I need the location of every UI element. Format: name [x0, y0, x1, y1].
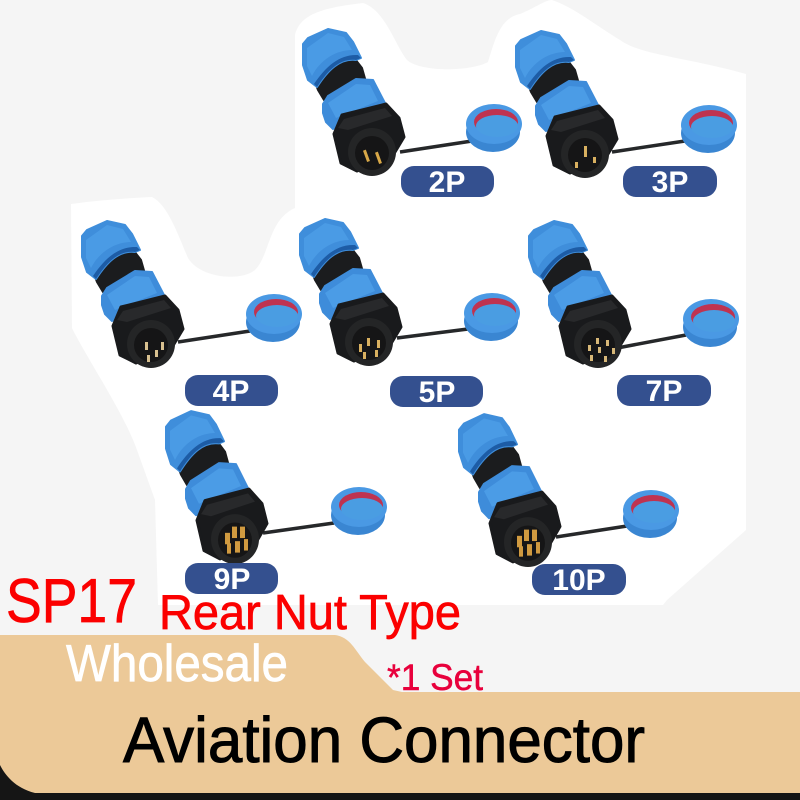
white product area: [71, 0, 746, 605]
connector: 7P: [529, 221, 739, 368]
connector: 4P: [82, 221, 302, 368]
connector body: [300, 219, 401, 366]
connector body: [516, 31, 617, 178]
text: Wholesale: Wholesale: [66, 635, 288, 693]
cable and dust cap: [612, 105, 737, 153]
label: 4P: [185, 375, 278, 408]
connector: 2P: [303, 29, 522, 176]
label: 7P: [617, 375, 711, 408]
connector body: [529, 221, 630, 368]
connector body: [303, 29, 404, 176]
connector body: [82, 221, 183, 368]
cable and dust cap: [397, 293, 520, 341]
label: 9P: 9P: [214, 563, 250, 596]
connector: 9P: [166, 411, 387, 564]
label: 9P: [185, 563, 278, 596]
connector: 5P: [300, 219, 520, 366]
connector body: [459, 414, 560, 567]
label: 2P: [401, 166, 494, 199]
connector: 3P: [516, 31, 737, 178]
bottom black strip: [0, 760, 800, 800]
cable and dust cap: [178, 294, 302, 342]
connector body: [166, 411, 267, 564]
heading: SP17: SP17: [6, 567, 137, 636]
label: 4P: 4P: [213, 375, 249, 408]
label: 5P: 5P: [419, 376, 455, 409]
label: 10P: 10P: [552, 564, 606, 597]
label: 2P: 2P: [429, 166, 465, 199]
label: 3P: 3P: [652, 166, 688, 199]
cable and dust cap: [556, 490, 679, 538]
label: 7P: 7P: [646, 375, 682, 408]
cable and dust cap: [263, 487, 387, 535]
label: 5P: [390, 376, 483, 409]
cable and dust cap: [612, 299, 739, 349]
label: 3P: [623, 166, 717, 199]
label: 10P: [532, 564, 626, 597]
connector: 10P: [459, 414, 679, 567]
tan banner: [0, 635, 800, 793]
text: 1 Set: *1 Set: [387, 657, 484, 698]
cable and dust cap: [400, 104, 522, 152]
subheading: Rear Nut Type: Rear Nut Type: [159, 586, 461, 640]
title: Aviation Connector: Aviation Connector: [123, 704, 645, 776]
